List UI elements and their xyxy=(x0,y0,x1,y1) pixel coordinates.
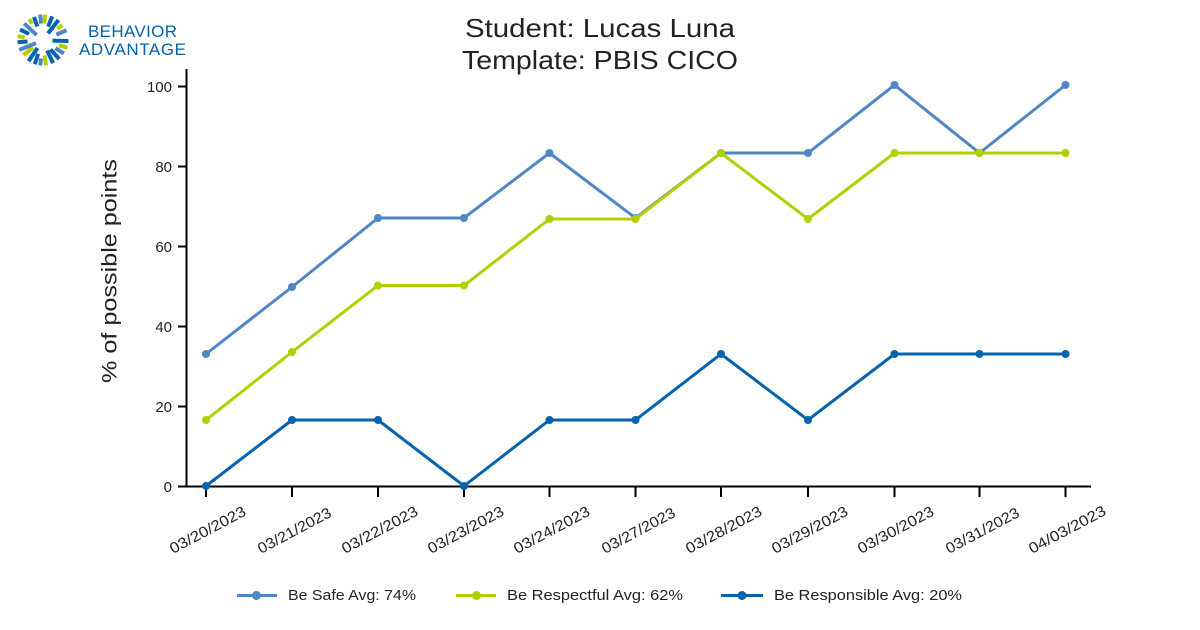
line series: Be Responsible xyxy=(202,350,1070,490)
x axis: 03/28/2023 xyxy=(683,503,765,558)
x axis: 03/21/2023 xyxy=(255,504,334,558)
y axis: 20 xyxy=(155,399,172,416)
y axis: 80 xyxy=(155,159,172,176)
y axis xyxy=(147,69,186,496)
x axis: 03/31/2023 xyxy=(943,504,1022,558)
logo: Behavior Advantage xyxy=(18,15,186,65)
logo wordmark: BEHAVIOR xyxy=(88,22,177,41)
y axis: 100 xyxy=(147,79,172,96)
x axis: 03/22/2023 xyxy=(339,503,421,558)
x axis xyxy=(167,486,1109,558)
legend item: Be Respectful: Be Respectful Avg: 62% xyxy=(507,588,683,604)
legend item: Be Safe xyxy=(237,588,416,604)
line series: Be Respectful xyxy=(202,149,1070,424)
logo wordmark: ADVANTAGE xyxy=(79,40,186,59)
x axis: 03/30/2023 xyxy=(855,503,937,558)
legend item: Be Respectful xyxy=(456,588,683,604)
x axis: 04/03/2023 xyxy=(1026,503,1109,558)
line series: Be Safe xyxy=(202,81,1070,358)
title xyxy=(462,13,738,75)
legend item: Be Responsible: Be Responsible Avg: 20% xyxy=(774,588,962,604)
legend item: Be Safe: Be Safe Avg: 74% xyxy=(288,588,416,604)
x axis: 03/29/2023 xyxy=(769,503,851,558)
legend item: Be Responsible xyxy=(721,588,962,604)
x axis: 03/23/2023 xyxy=(425,503,507,558)
title: Student: Lucas Luna xyxy=(465,13,736,43)
logo wordmark xyxy=(79,22,186,59)
y axis: 0 xyxy=(164,479,172,496)
icon: logo sunburst xyxy=(18,15,68,65)
x axis: 03/20/2023 xyxy=(167,503,249,558)
y axis: 40 xyxy=(155,319,172,336)
legend xyxy=(237,588,962,604)
y axis label: % of possible points xyxy=(98,159,122,383)
x axis: 03/27/2023 xyxy=(599,504,678,558)
y axis: 60 xyxy=(155,239,172,256)
x axis: 03/24/2023 xyxy=(511,503,593,558)
title: Template: PBIS CICO xyxy=(462,45,738,75)
